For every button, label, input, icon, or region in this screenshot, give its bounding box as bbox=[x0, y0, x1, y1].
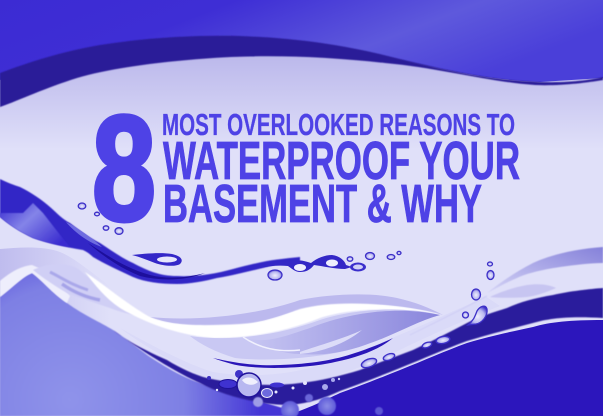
splash drop bbox=[132, 253, 182, 266]
left splash bbox=[0, 179, 300, 284]
water ribbon: lower lavender bbox=[243, 311, 440, 355]
title: numeral 8: 8 bbox=[92, 84, 156, 252]
left blue hill bbox=[0, 273, 310, 416]
pale band beneath ribbon bbox=[120, 296, 500, 384]
water ribbon: white streak bbox=[85, 272, 443, 338]
bottom right dark band bbox=[113, 288, 603, 405]
bubbles below band bbox=[253, 394, 383, 416]
right splash bbox=[260, 255, 366, 272]
right plume bbox=[410, 247, 603, 335]
water ribbon: textured highlight bbox=[33, 264, 150, 317]
water ribbon: thin white curve bbox=[243, 337, 300, 351]
dark thin stroke bbox=[213, 338, 393, 368]
bubbles in dark band bbox=[207, 370, 340, 398]
pale ribbon beneath the white streak bbox=[190, 310, 440, 359]
water ribbon: upper lavender bbox=[150, 294, 443, 326]
back wave band bbox=[0, 247, 150, 416]
bottom right deep water bbox=[285, 320, 603, 416]
water drops bbox=[78, 203, 494, 369]
top wave: sky bbox=[0, 0, 603, 82]
top wave: dark band bbox=[0, 36, 603, 107]
white rim of hill bbox=[0, 265, 70, 303]
